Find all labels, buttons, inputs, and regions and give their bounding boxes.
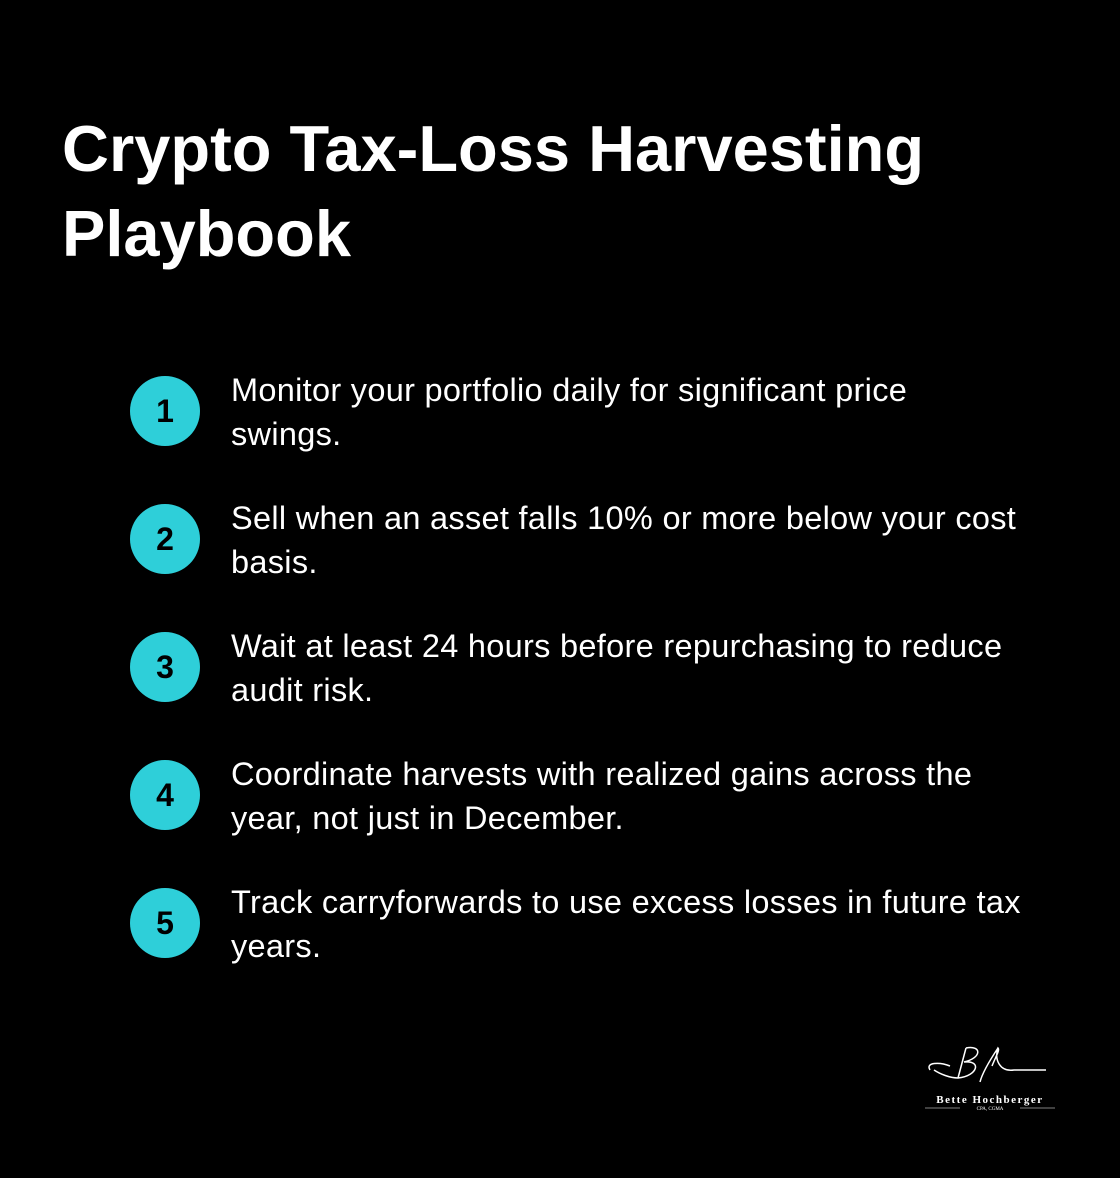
- step 3: audit risk.: [231, 672, 373, 708]
- step 5: 5: [156, 905, 174, 941]
- title: [62, 112, 924, 270]
- step 2: 2: [156, 521, 174, 557]
- step 2: Sell when an asset falls 10% or more below your cost: [231, 500, 1016, 536]
- step 4: year, not just in December.: [231, 800, 624, 836]
- title: Playbook: [62, 197, 351, 270]
- step 1: swings.: [231, 416, 341, 452]
- step 3: [130, 628, 1002, 708]
- step 4: 4: [156, 777, 174, 813]
- logo: CPA, CGMA: [977, 1107, 1004, 1112]
- step 5: [130, 884, 1021, 964]
- logo: Bette Hochberger: [936, 1094, 1044, 1106]
- step 1: Monitor your portfolio daily for significant price: [231, 372, 907, 408]
- step 4: [130, 756, 972, 836]
- logo: [925, 1046, 1055, 1112]
- step 1: [130, 372, 907, 452]
- title: Crypto Tax-Loss Harvesting: [62, 112, 924, 185]
- step 1: 1: [156, 393, 174, 429]
- step 5: years.: [231, 928, 321, 964]
- step 4: Coordinate harvests with realized gains across the: [231, 756, 972, 792]
- step 3: 3: [156, 649, 174, 685]
- step 2: [130, 500, 1016, 580]
- step 3: Wait at least 24 hours before repurchasing to reduce: [231, 628, 1002, 664]
- step 2: basis.: [231, 544, 318, 580]
- step 5: Track carryforwards to use excess losses in future tax: [231, 884, 1021, 920]
